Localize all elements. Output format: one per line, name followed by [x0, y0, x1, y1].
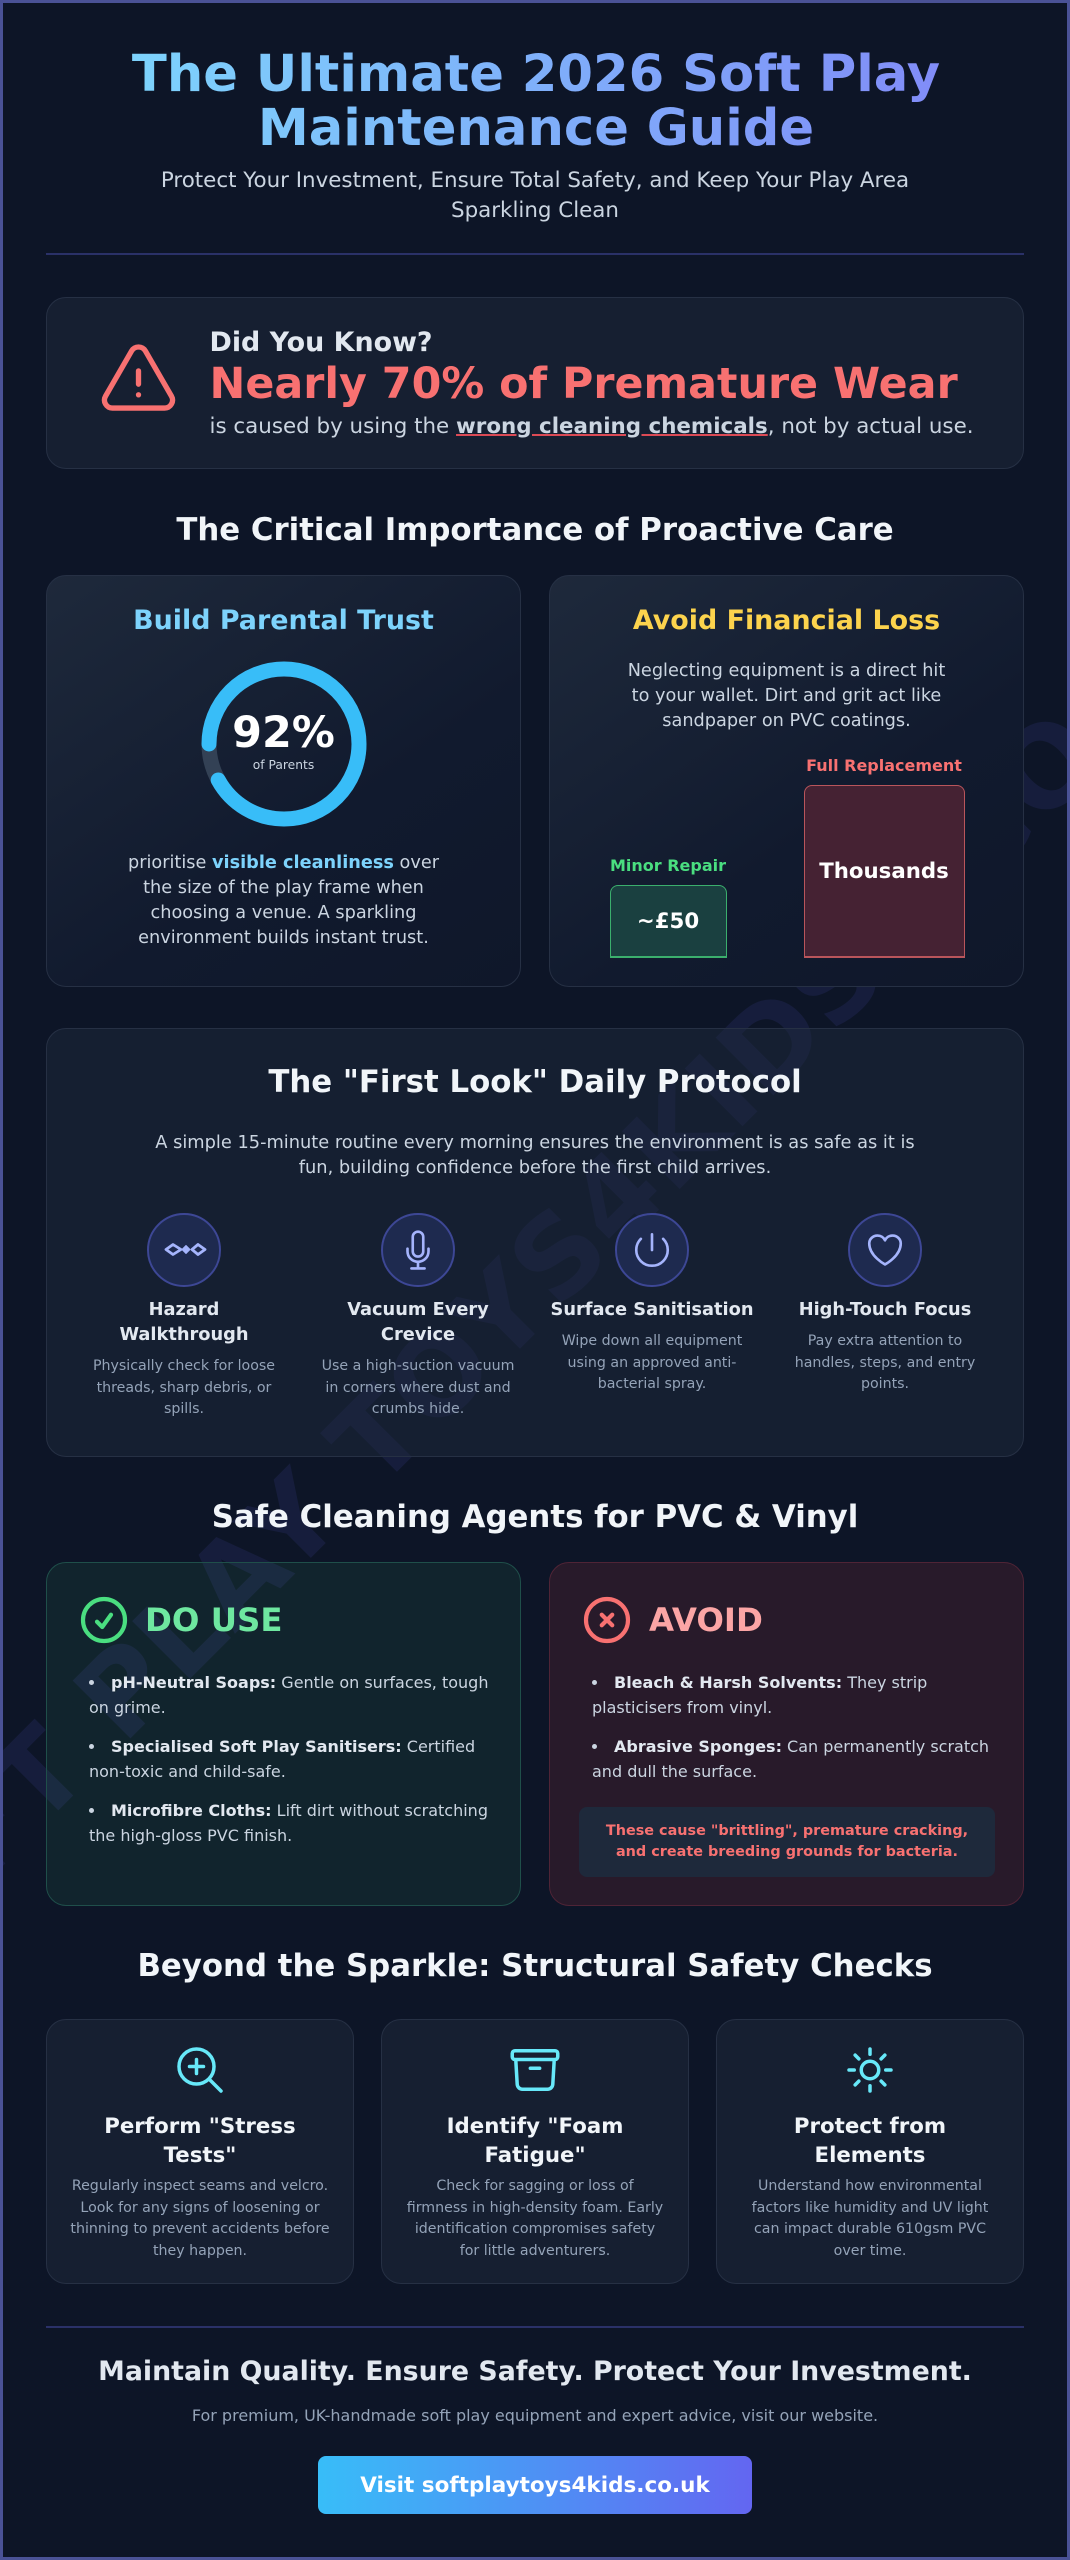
step title [347, 1298, 489, 1344]
icon: power [615, 1213, 689, 1287]
step title: Crevice [381, 1324, 455, 1344]
panel heading: Build Parental Trust [133, 604, 434, 636]
step text [93, 1358, 275, 1417]
warning note: These cause "brittling", premature cracking, [606, 1822, 968, 1838]
card text: can impact durable 610gsm PVC [754, 2221, 986, 2237]
card text: thinning to prevent accidents before [70, 2221, 330, 2237]
card text: identification compromises safety [415, 2221, 655, 2237]
panel: avoid [549, 1562, 1024, 1906]
panel text [128, 852, 439, 948]
bar: full replacement [804, 785, 964, 958]
step: hazard walkthrough [93, 1213, 275, 1417]
step text [322, 1358, 514, 1417]
heading: structural safety checks: Beyond the Sparkle: Structural Safety Checks [137, 1948, 933, 1984]
donut chart: 92% [202, 662, 366, 826]
list: safe agents: pH-Neutral Soaps: Gentle on surfaces, tough [111, 1673, 488, 1692]
panel: do use [46, 1562, 521, 1906]
card text [70, 2178, 330, 2258]
card text: Check for sagging or loss of [436, 2178, 634, 2194]
panel: first look daily protocol [46, 1028, 1024, 1457]
panel: foam fatigue [381, 2019, 689, 2284]
icon: magnifier [177, 2047, 223, 2093]
panel heading: AVOID [649, 1601, 763, 1639]
donut value: 92% [232, 708, 335, 758]
bar: minor repair: ~£50 [637, 908, 699, 934]
step: surface sanitisation [551, 1213, 753, 1392]
header [132, 44, 940, 223]
list: safe agents: Specialised Soft Play Sanitisers: Certified [111, 1737, 475, 1756]
panel heading: The "First Look" Daily Protocol [268, 1064, 802, 1100]
card text: Look for any signs of loosening or [80, 2200, 320, 2216]
list: safe agents: non-toxic and child-safe. [89, 1762, 286, 1781]
subtitle: Sparkling Clean [451, 198, 619, 223]
panel text: fun, building confidence before the first child arrives. [299, 1156, 771, 1178]
title [130, 47, 942, 155]
list: agents to avoid: and dull the surface. [592, 1762, 757, 1781]
card title: Protect from [794, 2114, 946, 2138]
panel text [628, 660, 945, 730]
panel text: to your wallet. Dirt and grit act like [632, 686, 941, 706]
bar chart: repair vs replacement [610, 756, 965, 958]
icon: heart [848, 1213, 922, 1287]
card title: Tests" [164, 2142, 236, 2168]
panel heading: Avoid Financial Loss [633, 604, 940, 636]
title: Maintenance Guide [258, 98, 814, 158]
icon: warning triangle [102, 344, 176, 411]
card text: they happen. [153, 2242, 247, 2258]
icon: microphone [381, 1213, 455, 1287]
bar: minor repair [610, 885, 726, 958]
panel text: A simple 15-minute routine every morning ensures the environment is as safe as it is [155, 1132, 915, 1152]
list: safe agents: the high-gloss PVC finish. [89, 1826, 292, 1845]
card text: Understand how environmental [758, 2178, 982, 2194]
step: high-touch focus [795, 1213, 975, 1392]
bar label: full replacement: Full Replacement [806, 756, 962, 775]
call to action button: Visit softplaytoys4kids.co.uk [360, 2472, 710, 2498]
heading: proactive care: The Critical Importance of Proactive Care [176, 512, 894, 548]
step text: bacterial spray. [598, 1376, 706, 1392]
step title: High-Touch Focus [799, 1298, 971, 1320]
panel: did you know callout [46, 297, 1024, 469]
list: agents to avoid: Abrasive Sponges: Can permanently scratch [614, 1737, 989, 1756]
panel: build parental trust [46, 575, 521, 987]
card title [447, 2114, 623, 2168]
step text: Use a high-suction vacuum [322, 1358, 514, 1374]
icon: sun [847, 2047, 893, 2093]
card text: Regularly inspect seams and velcro. [72, 2178, 328, 2194]
step text: threads, sharp debris, or [97, 1380, 271, 1396]
card text: over time. [834, 2242, 906, 2258]
title: The Ultimate 2026 Soft Play [132, 44, 940, 104]
card text [407, 2178, 663, 2258]
card text: for little adventurers. [460, 2242, 610, 2258]
step text: in corners where dust and [325, 1380, 511, 1396]
panel: stress tests [46, 2019, 354, 2284]
panel: avoid financial loss [549, 575, 1024, 987]
list: agents to avoid: plasticisers from vinyl. [592, 1698, 772, 1717]
step text: crumbs hide. [372, 1401, 464, 1417]
footer heading: Maintain Quality. Ensure Safety. Protect Your Investment. [98, 2356, 972, 2387]
step title: Hazard [149, 1298, 219, 1320]
list: agents to avoid: Bleach & Harsh Solvents: They strip [614, 1673, 927, 1692]
step title: Walkthrough [119, 1324, 249, 1344]
panel text [155, 1132, 915, 1178]
callout label: Did You Know? [210, 327, 433, 358]
step title: Surface Sanitisation [551, 1298, 753, 1320]
panel text: sandpaper on PVC coatings. [662, 710, 911, 730]
step text: handles, steps, and entry [795, 1354, 975, 1370]
panel text: Neglecting equipment is a direct hit [628, 660, 945, 680]
step text [795, 1333, 975, 1392]
step text: Physically check for loose [93, 1358, 275, 1374]
card title: Identify "Foam [447, 2114, 623, 2138]
step: vacuum every crevice [322, 1213, 514, 1417]
panel text: environment builds instant trust. [138, 928, 429, 948]
card title [104, 2114, 296, 2168]
panel text: choosing a venue. A sparkling [151, 902, 416, 922]
panel text: prioritise visible cleanliness over [128, 852, 439, 872]
step title: Vacuum Every [347, 1298, 489, 1320]
panel heading: DO USE [145, 1601, 282, 1639]
call to action button [318, 2456, 752, 2514]
footer text: For premium, UK-handmade soft play equipment and expert advice, visit our website. [192, 2406, 878, 2424]
warning note: and create breeding grounds for bacteria. [616, 1844, 958, 1860]
list: safe agents: on grime. [89, 1698, 166, 1717]
bar label: minor repair: Minor Repair [610, 856, 726, 875]
step title [119, 1298, 249, 1344]
icon: archive box [510, 2049, 560, 2091]
step text: points. [861, 1376, 909, 1392]
step text: spills. [164, 1401, 204, 1417]
list: safe agents [89, 1673, 488, 1845]
subtitle [161, 168, 909, 223]
card text: factors like humidity and UV light [752, 2200, 988, 2216]
step text [562, 1333, 742, 1392]
list: agents to avoid [592, 1673, 989, 1781]
card title: Elements [815, 2142, 925, 2168]
card text [752, 2178, 988, 2258]
bar: full replacement: Thousands [819, 858, 949, 884]
warning note [579, 1807, 995, 1877]
card title: Fatigue" [484, 2142, 586, 2168]
panel text: the size of the play frame when [143, 878, 424, 898]
donut label: of Parents [253, 758, 314, 772]
panel: protect from elements [716, 2019, 1024, 2284]
step text: using an approved anti- [568, 1354, 736, 1370]
callout statistic: Nearly 70% of Premature Wear [210, 359, 958, 409]
callout text: is caused by using the wrong cleaning chemicals, not by actual use. [210, 414, 974, 439]
step text: Wipe down all equipment [562, 1333, 742, 1349]
icon: check circle [80, 1596, 128, 1644]
card text: firmness in high-density foam. Early [407, 2200, 663, 2216]
step text: Pay extra attention to [808, 1333, 962, 1349]
card title [794, 2114, 946, 2168]
icon: hazard [147, 1213, 221, 1287]
icon: x circle [584, 1596, 630, 1644]
card title: Perform "Stress [104, 2114, 296, 2138]
list: safe agents: Microfibre Cloths: Lift dirt without scratching [111, 1801, 488, 1820]
subtitle: Protect Your Investment, Ensure Total Safety, and Keep Your Play Area [161, 168, 909, 193]
heading: safe cleaning agents: Safe Cleaning Agents for PVC & Vinyl [212, 1499, 858, 1535]
